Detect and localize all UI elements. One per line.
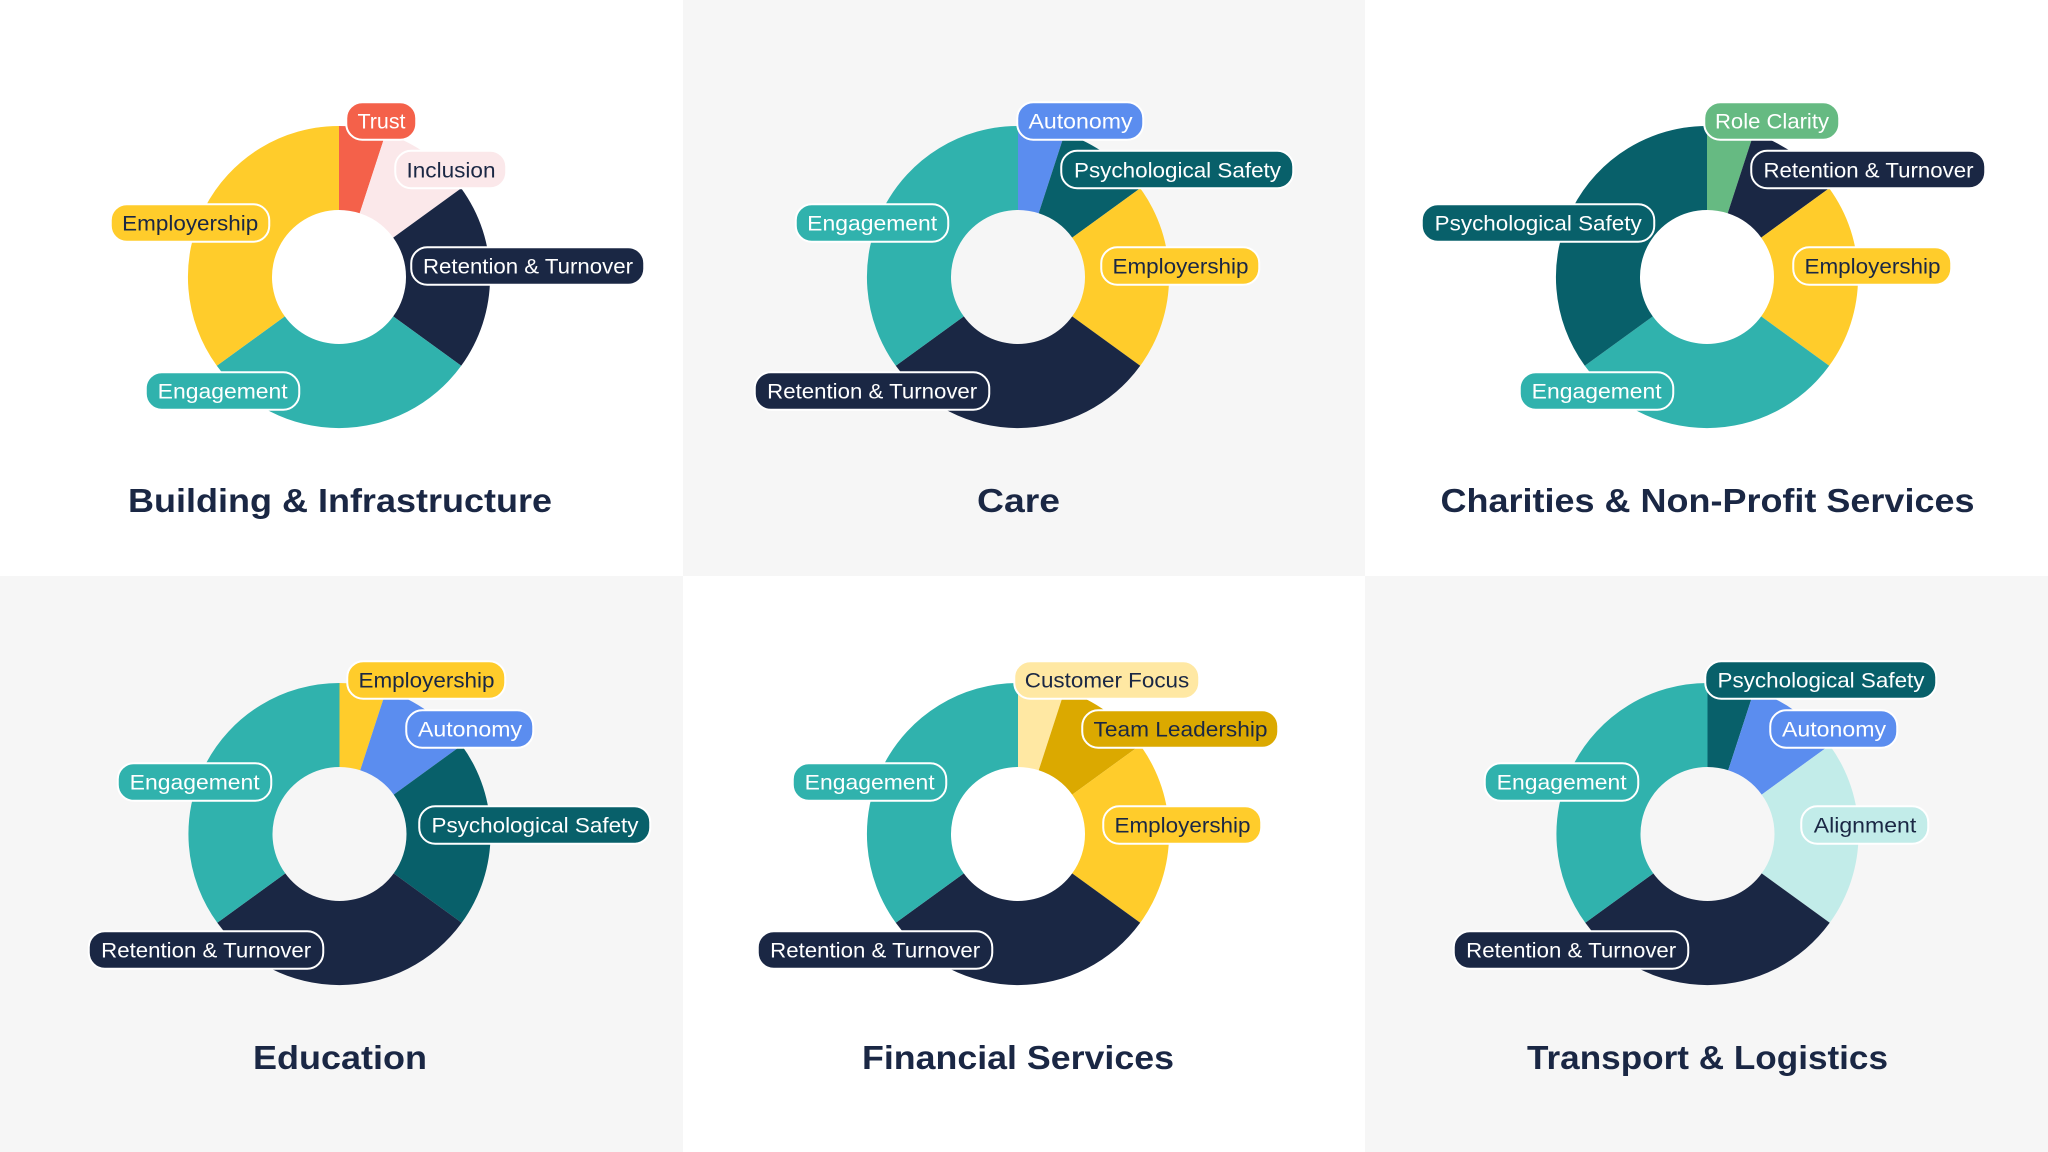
- label: Engagement: Engagement: [158, 380, 288, 404]
- label: Employership: Employership: [358, 668, 495, 692]
- label: Role Clarity: [1704, 102, 1839, 140]
- panel: Charities & Non-Profit Services: [1365, 0, 2048, 576]
- label: Employership: Employership: [1112, 254, 1249, 278]
- label: Autonomy: [406, 710, 533, 748]
- label: Autonomy: [1770, 710, 1897, 748]
- label: Engagement: Engagement: [130, 770, 260, 794]
- heading: Financial Services: Financial Services: [862, 1040, 1174, 1077]
- label: Role Clarity: Role Clarity: [1715, 110, 1829, 134]
- label: Retention & Turnover: [411, 247, 644, 285]
- label: Employership: Employership: [1804, 254, 1941, 278]
- panel: Building & Infrastructure: [0, 0, 683, 576]
- label: Employership: [111, 204, 269, 242]
- label: Retention & Turnover: [1454, 931, 1688, 969]
- donut chart: Building & Infrastructure: [188, 126, 490, 428]
- label: Engagement: Engagement: [805, 770, 935, 794]
- label: Engagement: [118, 763, 271, 801]
- label: Customer Focus: Customer Focus: [1025, 668, 1189, 692]
- label: Employership: [1101, 247, 1259, 285]
- heading: Building & Infrastructure: Building & Infrastructure: [128, 483, 552, 520]
- donut chart: Education: [188, 683, 491, 985]
- label: Autonomy: Autonomy: [418, 718, 522, 742]
- label: Employership: [347, 661, 505, 699]
- label: Team Leadership: Team Leadership: [1094, 718, 1268, 742]
- label: Psychological Safety: Psychological Safety: [1074, 158, 1281, 182]
- label: Alignment: Alignment: [1814, 814, 1916, 838]
- label: Engagement: [796, 204, 948, 242]
- heading: Charities & Non-Profit Services: Charities & Non-Profit Services: [1440, 483, 1974, 520]
- label: Autonomy: [1017, 102, 1143, 140]
- label: Team Leadership: [1082, 710, 1278, 748]
- label: Retention & Turnover: Retention & Turnover: [1466, 938, 1676, 962]
- panel: Transport & Logistics: [1365, 576, 2048, 1152]
- label: Psychological Safety: [1061, 151, 1293, 188]
- donut chart: Transport & Logistics: [1556, 683, 1859, 985]
- panel: Financial Services: [683, 576, 1365, 1152]
- label: Retention & Turnover: [89, 931, 323, 969]
- label: Psychological Safety: [1705, 661, 1936, 699]
- label: Trust: Trust: [358, 110, 406, 134]
- heading: Transport & Logistics: Transport & Logistics: [1527, 1040, 1888, 1077]
- label: Engagement: [1485, 763, 1638, 801]
- panel: Care: [683, 0, 1365, 576]
- label: Retention & Turnover: [1751, 151, 1985, 188]
- label: Engagement: Engagement: [807, 212, 937, 236]
- label: Trust: [346, 102, 416, 140]
- label: Engagement: [146, 372, 299, 410]
- label: Psychological Safety: [419, 806, 650, 844]
- label: Employership: Employership: [122, 212, 258, 236]
- label: Engagement: Engagement: [1532, 380, 1662, 404]
- label: Psychological Safety: [1422, 204, 1654, 242]
- label: Retention & Turnover: Retention & Turnover: [423, 254, 633, 278]
- label: Alignment: [1801, 806, 1928, 844]
- label: Psychological Safety: Psychological Safety: [1718, 668, 1925, 692]
- label: Customer Focus: [1014, 661, 1199, 699]
- label: Psychological Safety: Psychological Safety: [1435, 212, 1642, 236]
- label: Autonomy: Autonomy: [1782, 718, 1886, 742]
- heading: Care: Care: [977, 483, 1060, 520]
- label: Autonomy: Autonomy: [1028, 110, 1133, 134]
- label: Engagement: [1520, 372, 1673, 410]
- heading: Education: Education: [253, 1040, 427, 1077]
- label: Engagement: Engagement: [1497, 770, 1627, 794]
- label: Retention & Turnover: Retention & Turnover: [767, 380, 977, 404]
- label: Engagement: [793, 763, 946, 801]
- label: Employership: [1793, 247, 1951, 285]
- donut chart: Charities & Non-Profit Services: [1556, 126, 1858, 428]
- label: Retention & Turnover: Retention & Turnover: [1764, 158, 1974, 182]
- label: Retention & Turnover: Retention & Turnover: [101, 938, 311, 962]
- label: Inclusion: Inclusion: [406, 158, 496, 182]
- label: Employership: Employership: [1114, 814, 1251, 838]
- panel: Education: [0, 576, 683, 1152]
- label: Employership: [1103, 806, 1261, 844]
- label: Retention & Turnover: Retention & Turnover: [770, 938, 980, 962]
- label: Psychological Safety: Psychological Safety: [432, 814, 639, 838]
- donut chart: Care: [867, 126, 1169, 428]
- label: Retention & Turnover: [758, 931, 992, 969]
- label: Retention & Turnover: [755, 372, 989, 410]
- donut chart: Financial Services: [867, 683, 1169, 985]
- label: Inclusion: [395, 151, 506, 188]
